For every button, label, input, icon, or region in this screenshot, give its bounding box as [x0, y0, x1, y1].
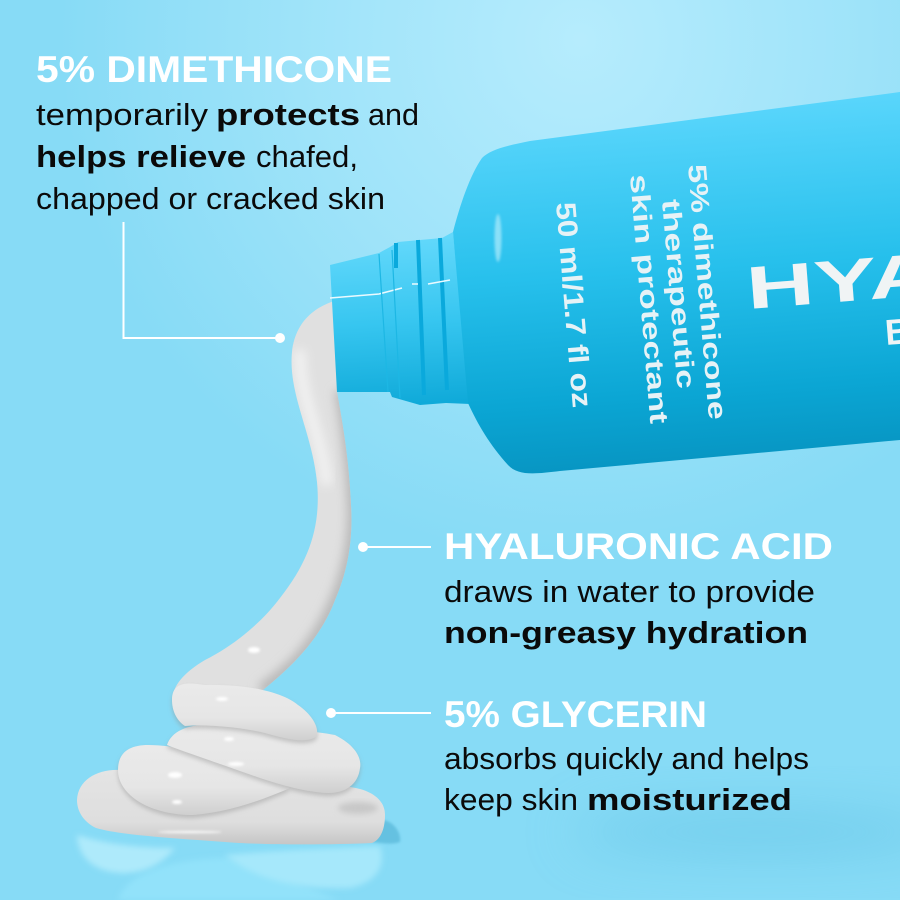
- callout: 5% dimethicone: helps relieve: [36, 139, 246, 174]
- callout: 5% dimethicone: 5% DIMETHICONE: [36, 49, 392, 90]
- dollop base layer: [77, 770, 385, 844]
- callout: 5% glycerin: 5% GLYCERIN: [444, 694, 707, 735]
- dollop top coil: [172, 684, 317, 740]
- tube label text: therapeutic: [656, 198, 701, 390]
- callout: 5% dimethicone: protects: [216, 97, 360, 132]
- tube label text: 50 ml/1.7 fl oz: [550, 201, 598, 409]
- tube: [330, 92, 900, 473]
- callout: hyaluronic acid: draws in water to provide: [444, 574, 815, 609]
- tube body: [453, 92, 900, 473]
- leader line: glycerin: [326, 708, 431, 718]
- tube label text: 5% dimethicone: [682, 163, 733, 421]
- tube label text: HYA: [744, 240, 900, 322]
- dollop left coil: [118, 745, 290, 815]
- leader line: hyaluronic acid: [358, 542, 431, 552]
- dollop middle coil: [167, 725, 360, 793]
- callout: 5% glycerin: absorbs quickly and helps: [444, 741, 809, 776]
- callout: 5% dimethicone: [36, 49, 419, 216]
- callout: 5% glycerin: [444, 694, 809, 817]
- callout: 5% glycerin: keep skin: [444, 782, 578, 817]
- tube highlight: [494, 214, 502, 262]
- callout: 5% dimethicone: and: [368, 97, 419, 132]
- shadow beside dollop: [372, 820, 400, 844]
- cream stream: [172, 298, 355, 702]
- callout: hyaluronic acid: HYALURONIC ACID: [444, 526, 833, 567]
- fold shading in base: [338, 802, 378, 814]
- callout: 5% dimethicone: chafed,: [256, 139, 358, 174]
- callout: hyaluronic acid: non-greasy hydration: [444, 615, 808, 650]
- cream reflection on surface: [77, 835, 382, 900]
- leader line: dimethicone: [124, 222, 285, 343]
- callout: 5% glycerin: moisturized: [587, 782, 792, 817]
- callout: hyaluronic acid: [444, 526, 833, 650]
- cream dollop: [77, 647, 400, 844]
- tube label text: skin protectant: [624, 173, 674, 425]
- tube label text: [550, 163, 900, 425]
- callout: 5% dimethicone: chapped or cracked skin: [36, 181, 385, 216]
- callout: 5% dimethicone: temporarily: [36, 97, 209, 132]
- gloss highlights: [158, 647, 260, 833]
- surface shadow, lower right: [570, 810, 900, 854]
- tube cap and neck threads: [330, 232, 470, 405]
